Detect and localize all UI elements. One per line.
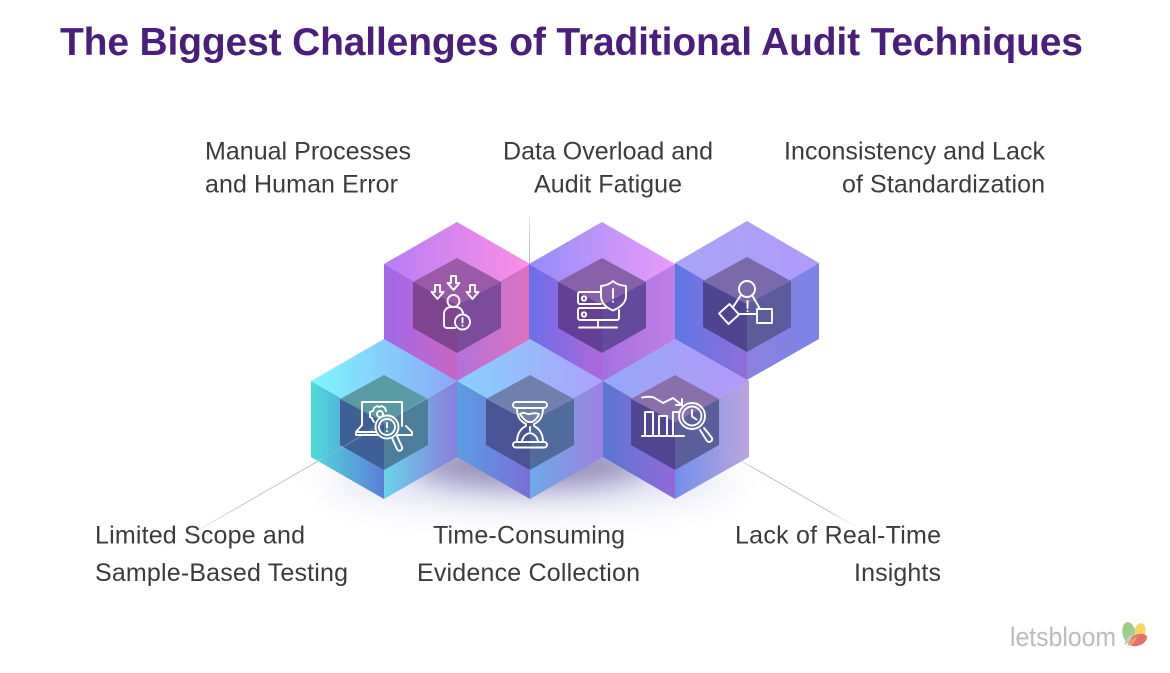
label: inconsistency: [784, 138, 1046, 198]
label: manual processes: and Human Error: [205, 170, 398, 198]
label: manual processes: [205, 138, 411, 198]
label: real-time insights: Lack of Real-Time: [735, 522, 941, 550]
label: time-consuming: [417, 522, 640, 587]
icon: server and shield: [578, 281, 626, 328]
label: limited scope: [95, 522, 348, 587]
connector: lower left: [150, 381, 457, 558]
icon: shapes with alert: [718, 281, 772, 325]
label: inconsistency: of Standardization: [842, 170, 1045, 198]
label: inconsistency: Inconsistency and Lack: [784, 138, 1046, 166]
icon: hourglass: [513, 402, 547, 448]
floor shadow: [325, 440, 735, 512]
title: The Biggest Challenges of Traditional Audit Techniques: [60, 21, 1083, 64]
icon: person with arrows: [432, 276, 478, 330]
label: manual processes: Manual Processes: [205, 138, 411, 166]
label: limited scope: Sample-Based Testing: [95, 559, 348, 587]
hexagon 4: limited scope: [311, 339, 457, 499]
hexagon 5: time-consuming: [457, 339, 603, 499]
connector: lower right: [717, 447, 865, 532]
label: real-time insights: Insights: [854, 559, 941, 587]
label: time-consuming: Time-Consuming: [433, 522, 625, 550]
hexagon 6: real-time insights: [603, 339, 749, 499]
logo petals: [1121, 621, 1149, 649]
label: data overload: Audit Fatigue: [534, 170, 682, 198]
hexagon 1: manual processes: [384, 222, 530, 382]
icon: bar chart with clock magnifier: [642, 397, 712, 442]
label: data overload: Data Overload and: [503, 138, 713, 166]
connector: top centre: [528, 216, 530, 264]
hexagon 3: inconsistency: [675, 221, 819, 380]
label: limited scope: Limited Scope and: [95, 522, 305, 550]
hexagon 2: data overload: [529, 222, 675, 382]
icon: laptop with gear and magnifier: [356, 402, 412, 451]
label: data overload: [503, 138, 713, 198]
label: real-time insights: [735, 522, 941, 587]
label: time-consuming: Evidence Collection: [417, 559, 640, 587]
logo: letsbloom: letsbloom: [1010, 622, 1116, 652]
